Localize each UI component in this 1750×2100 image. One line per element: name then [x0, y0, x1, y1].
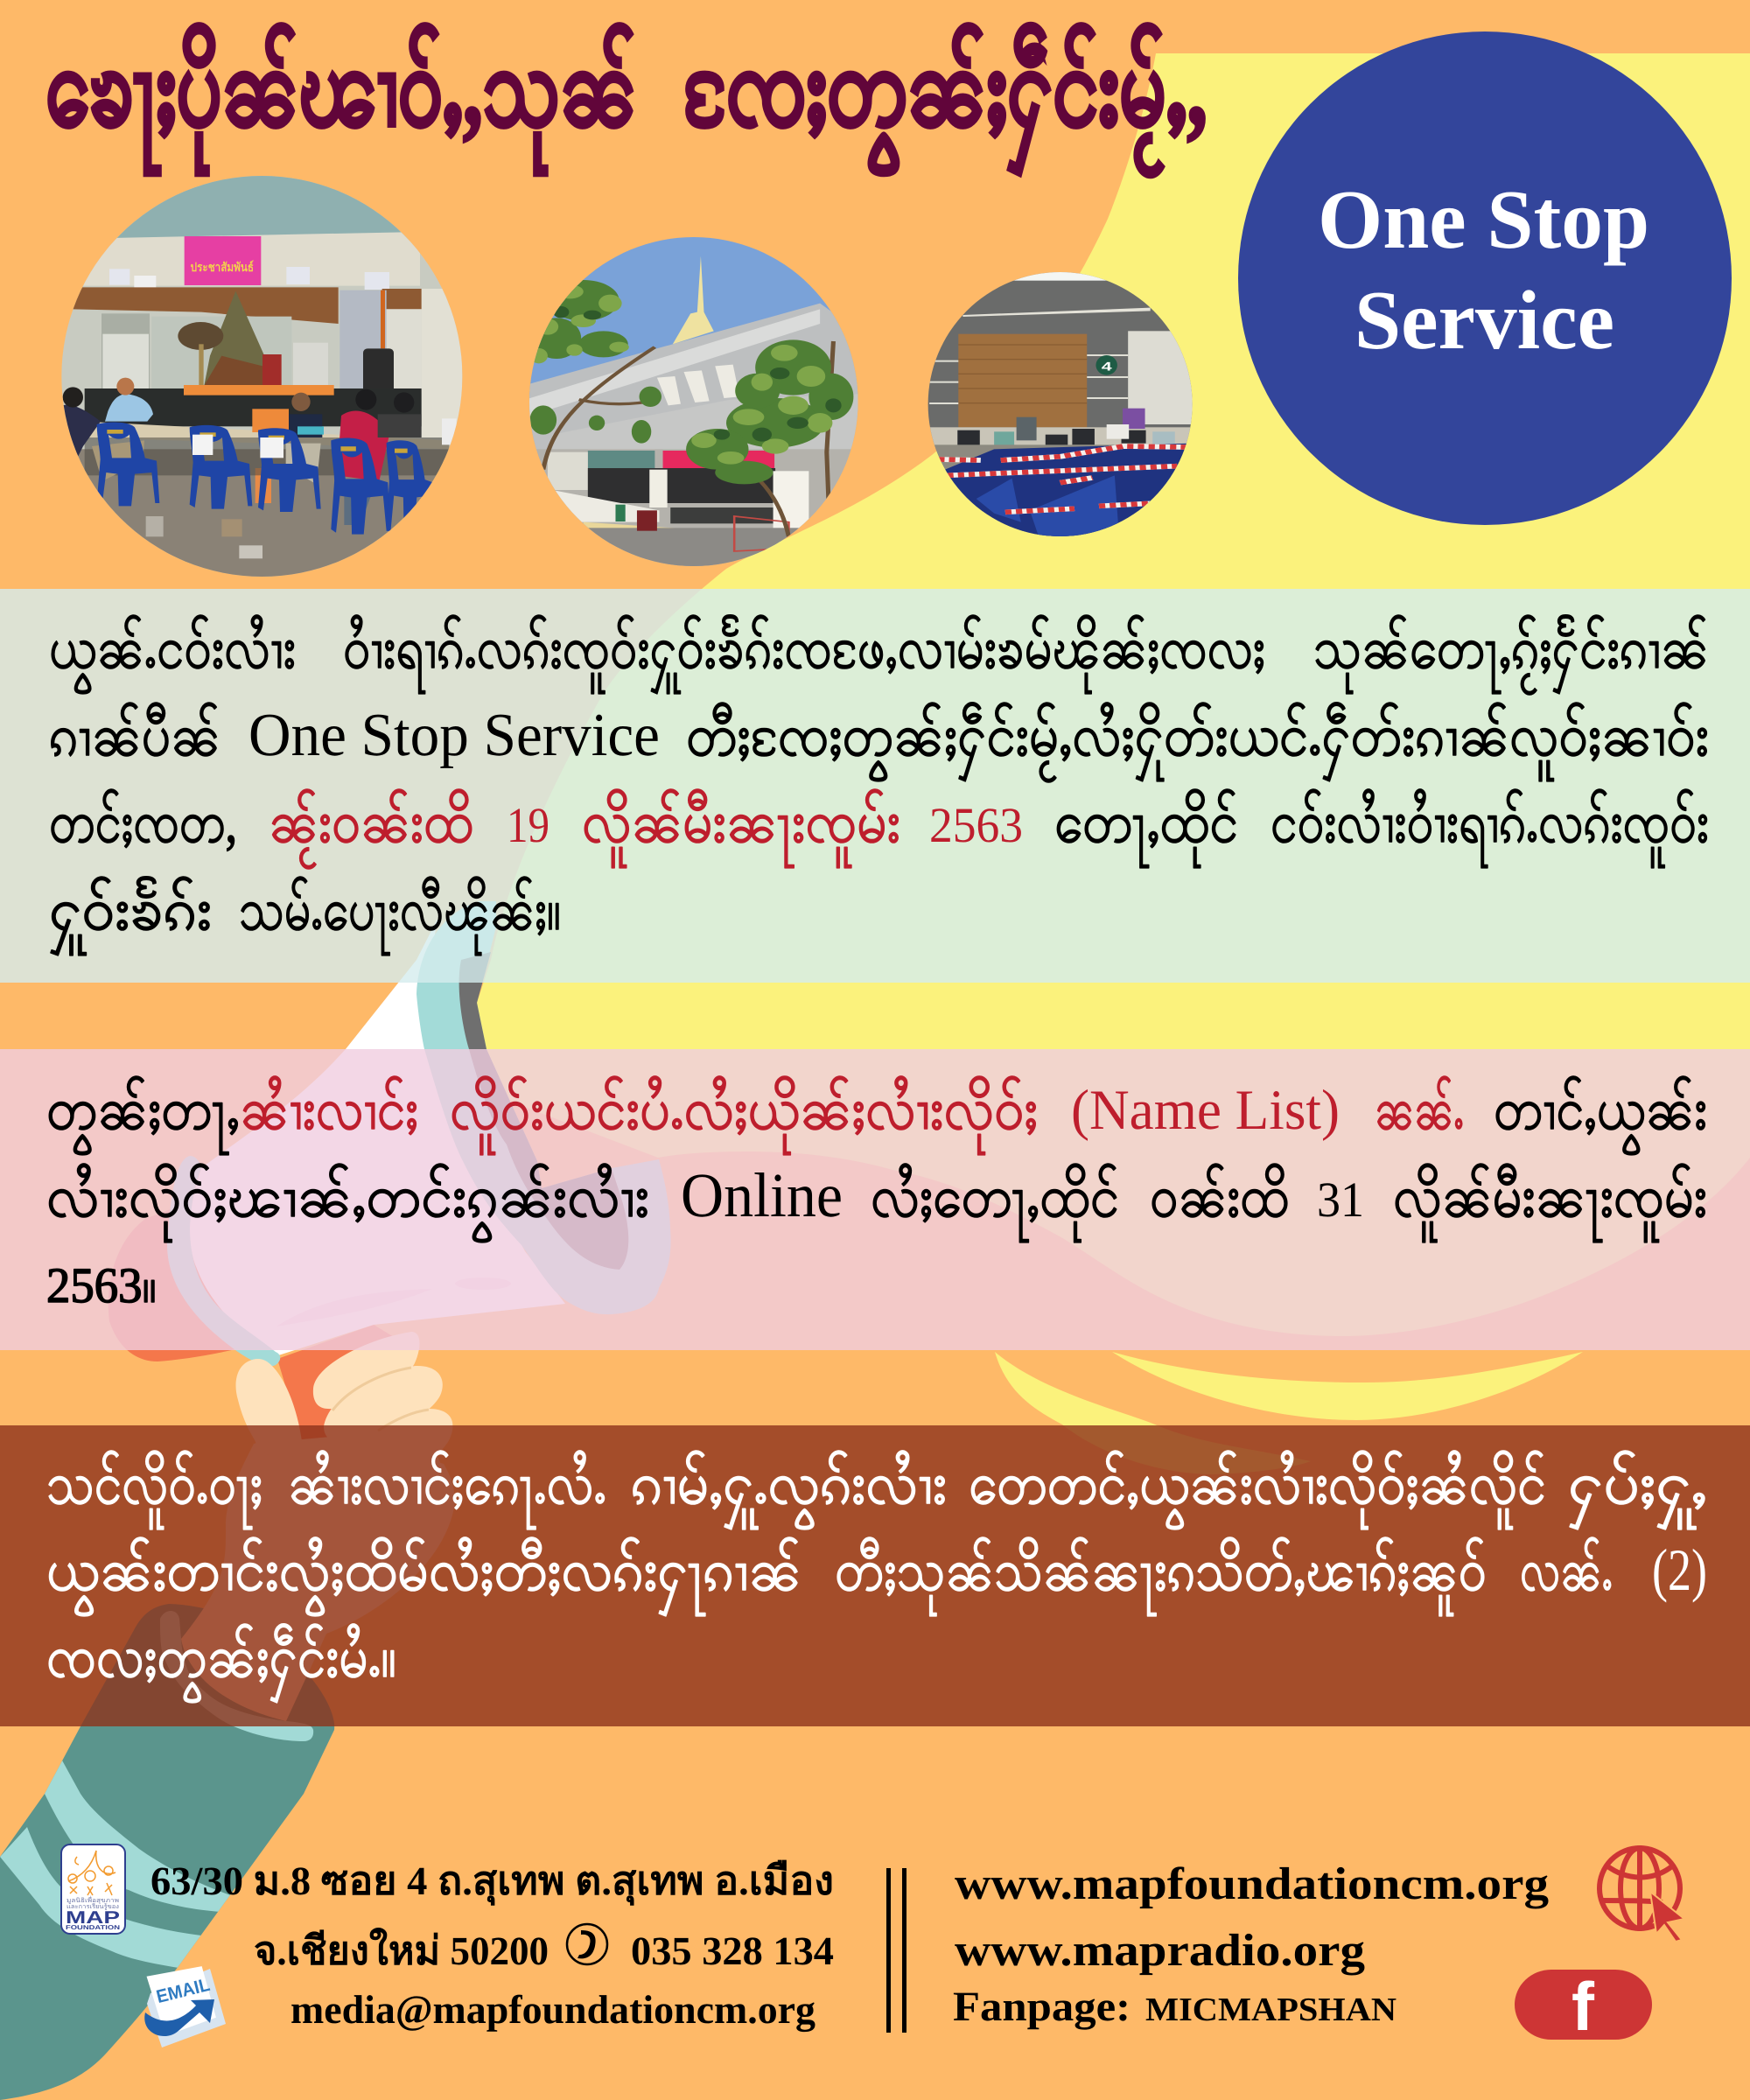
cuff stripe [160, 1611, 313, 1741]
icon: phone [567, 1924, 607, 1964]
panel: brown notice [0, 1425, 1750, 1726]
panel: pink notice [0, 1049, 1750, 1350]
person patterned [378, 414, 422, 438]
address line 1: 63/30 ม.8 ซอย 4 ถ.สุเทพ ต.สุเทพ อ.เมือง [150, 1858, 834, 1906]
name list paragraph: ၼၼ်ႉ [1375, 1075, 1464, 1142]
name list paragraph: လႆႈတေႃႇထိုင် [871, 1163, 1119, 1242]
name list paragraph: လၢႆးလိုဝ်ႈၽၢၼ်ႇတင်းၵွၼ်းလၢႆး [46, 1163, 649, 1242]
photo: information desk [59, 175, 466, 584]
website 1: www.mapfoundationcm.org [955, 1859, 1549, 1909]
barrier tape [938, 446, 1186, 512]
megaphone back rim [167, 1156, 280, 1366]
panel: green notice [0, 589, 1750, 983]
megaphone and hand illustration [0, 901, 671, 2100]
sleeve stripes [0, 1759, 241, 1969]
megaphone handle back [108, 1208, 350, 1362]
phone number: 035 328 134 [631, 1928, 834, 1973]
megaphone grip [277, 1325, 433, 1543]
icon: email: EMAIL [154, 1975, 212, 2007]
second dose paragraph: တီႈသုၼ်သိၼ်ၼႃးၵသိတ်ႇၽၢၵ်ႈၼူဝ် [835, 1536, 1487, 1616]
sleeve [0, 1604, 334, 2100]
second dose paragraph [46, 1450, 1707, 1703]
fanpage [953, 1984, 1396, 2030]
megaphone inner shadow [459, 952, 628, 1270]
yellow speech shape [477, 53, 1750, 1336]
name list paragraph: 2563။ [46, 1258, 157, 1313]
name list paragraph: ၼၢႆးလၢင်ႈ [240, 1075, 418, 1142]
fanpage: Fanpage: [953, 1984, 1130, 2030]
notice paragraph: ၼႂ်းဝၼ်းထိ [269, 788, 473, 869]
icon: MAP Foundation logo: MAP [66, 1908, 120, 1928]
name list paragraph: တၢင်ႇယွၼ်း [1494, 1075, 1707, 1155]
website 2: www.mapradio.org [955, 1926, 1365, 1976]
blue circle badge [1238, 32, 1732, 525]
title [46, 23, 1208, 178]
notice paragraph: သမ်ႉပေႃးလီၽိုၼ်ႈ။ [239, 876, 561, 956]
name list paragraph: လိူဝ်းယင်းပႆႉလႆႈယိုၼ်ႈလၢႆးလိုဝ်ႈ [450, 1075, 1038, 1155]
second dose paragraph: ယွၼ်းတၢင်းလွႆႈထိမ်လႆႈတီႈလၵ်းႁႃၵၢၼ် [46, 1536, 802, 1616]
name list paragraph: (Name List) [1071, 1079, 1340, 1142]
person in stripes [63, 405, 101, 461]
notice paragraph [49, 614, 1709, 956]
second dose paragraph: ၼၢႆးလၢင်ႈၵေႃႉလႆႉ [288, 1450, 606, 1530]
icon: email [144, 1965, 226, 2048]
second dose paragraph: ၸလႈတွၼ်ႈႁဵင်းမႆႉ။ [46, 1623, 396, 1703]
chairs [97, 423, 159, 506]
number marker [1096, 355, 1117, 375]
name list paragraph: ဝၼ်းထိ [1150, 1163, 1289, 1229]
foliage [530, 280, 853, 484]
icon: MAP Foundation logo: และการเรียนรู้ของ [66, 1903, 119, 1910]
second dose paragraph: လၼ်ႉ [1520, 1536, 1613, 1603]
icon: MAP Foundation logo [61, 1844, 125, 1934]
person in blue [105, 394, 153, 422]
notice paragraph: ယွၼ်ႉငဝ်းလၢႆး [49, 614, 296, 694]
photo: hall exterior [525, 234, 864, 569]
second dose paragraph: တေတင်ႇယွၼ်းလၢႆးလိုဝ်ႈၼႆလိူင် [969, 1450, 1546, 1530]
hand palm [181, 1435, 455, 1721]
title: ၸႄႈတွၼ်ႈႁဵင်းမႂ်ႇ, [683, 23, 1208, 178]
name list paragraph: Online [681, 1160, 843, 1230]
icon: MAP Foundation logo: FOUNDATION [66, 1925, 120, 1931]
megaphone cone [190, 919, 565, 1356]
name list paragraph: 31 [1317, 1172, 1364, 1228]
badge text [1318, 172, 1649, 367]
title: ၶေႃႈပိုၼ်ၽၢဝ်ႇ,သုၼ် [46, 24, 637, 176]
branches [543, 341, 833, 536]
icon: MAP Foundation logo: มูลนิธิเพื่อสุขภาพ [66, 1895, 119, 1904]
notice paragraph: တင်ႈၸတ, [49, 788, 237, 855]
second dose paragraph: ႁပ်ႈႁူႇ [1568, 1450, 1707, 1530]
megaphone bell [416, 901, 671, 1314]
notice paragraph: One Stop Service [248, 702, 660, 769]
photo: information desk: ประชาสัมพันธ์ [191, 260, 254, 274]
notice paragraph: 19 [507, 798, 550, 853]
name list paragraph [46, 1075, 1707, 1313]
notice paragraph: ၵၢၼ်ပီၼ် [49, 702, 220, 768]
icon: facebook [1515, 1968, 1652, 2045]
notice paragraph: ႁူဝ်းၶႅၵ်း [49, 876, 212, 956]
icon: globe with cursor [1600, 1848, 1684, 1942]
email address: media@mapfoundationcm.org [290, 1987, 816, 2033]
notice paragraph: လိူၼ်မီးၼႃးၸူမ်း [582, 788, 900, 868]
number marker: 4 [1102, 360, 1112, 373]
photo: service hall [928, 271, 1195, 540]
second dose paragraph: သင်လိူဝ်ႉဝႃႈ [46, 1450, 262, 1530]
icon: facebook: f [1572, 1968, 1595, 2045]
fanpage: MICMAPSHAN [1145, 1992, 1396, 2028]
fingers [313, 1332, 452, 1516]
badge text: One Stop [1318, 172, 1649, 266]
second dose paragraph: (2) [1652, 1536, 1707, 1603]
thumb [236, 1359, 302, 1459]
person dark [289, 414, 322, 438]
second dose paragraph: ၵၢမ်ႇႁူႉလွၵ်းလၢႆး [631, 1450, 947, 1530]
badge text: Service [1354, 273, 1614, 367]
notice paragraph: တေႃႇထိုင် [1054, 788, 1238, 868]
notice paragraph: ဝၢႆးရၢၵ်ႉလၵ်းၸူဝ်းႁူဝ်းၶႅၵ်းၸဖႄႇလၢမ်းၶမ်ၽိုၼ်ႈၸလႈ [343, 614, 1265, 694]
person red [337, 410, 389, 481]
name list paragraph: တွၼ်ႈတႃႇ [46, 1075, 240, 1155]
notice paragraph: 2563 [929, 798, 1023, 853]
megaphone highlights [276, 1289, 432, 1326]
yellow crescents [995, 1352, 1583, 1474]
footer divider [886, 1868, 906, 2033]
address line 2: จ.เชียงใหม่ 50200 [254, 1927, 549, 1973]
name list paragraph: လိူၼ်မီးၼႃးၸူမ်း [1393, 1163, 1707, 1242]
